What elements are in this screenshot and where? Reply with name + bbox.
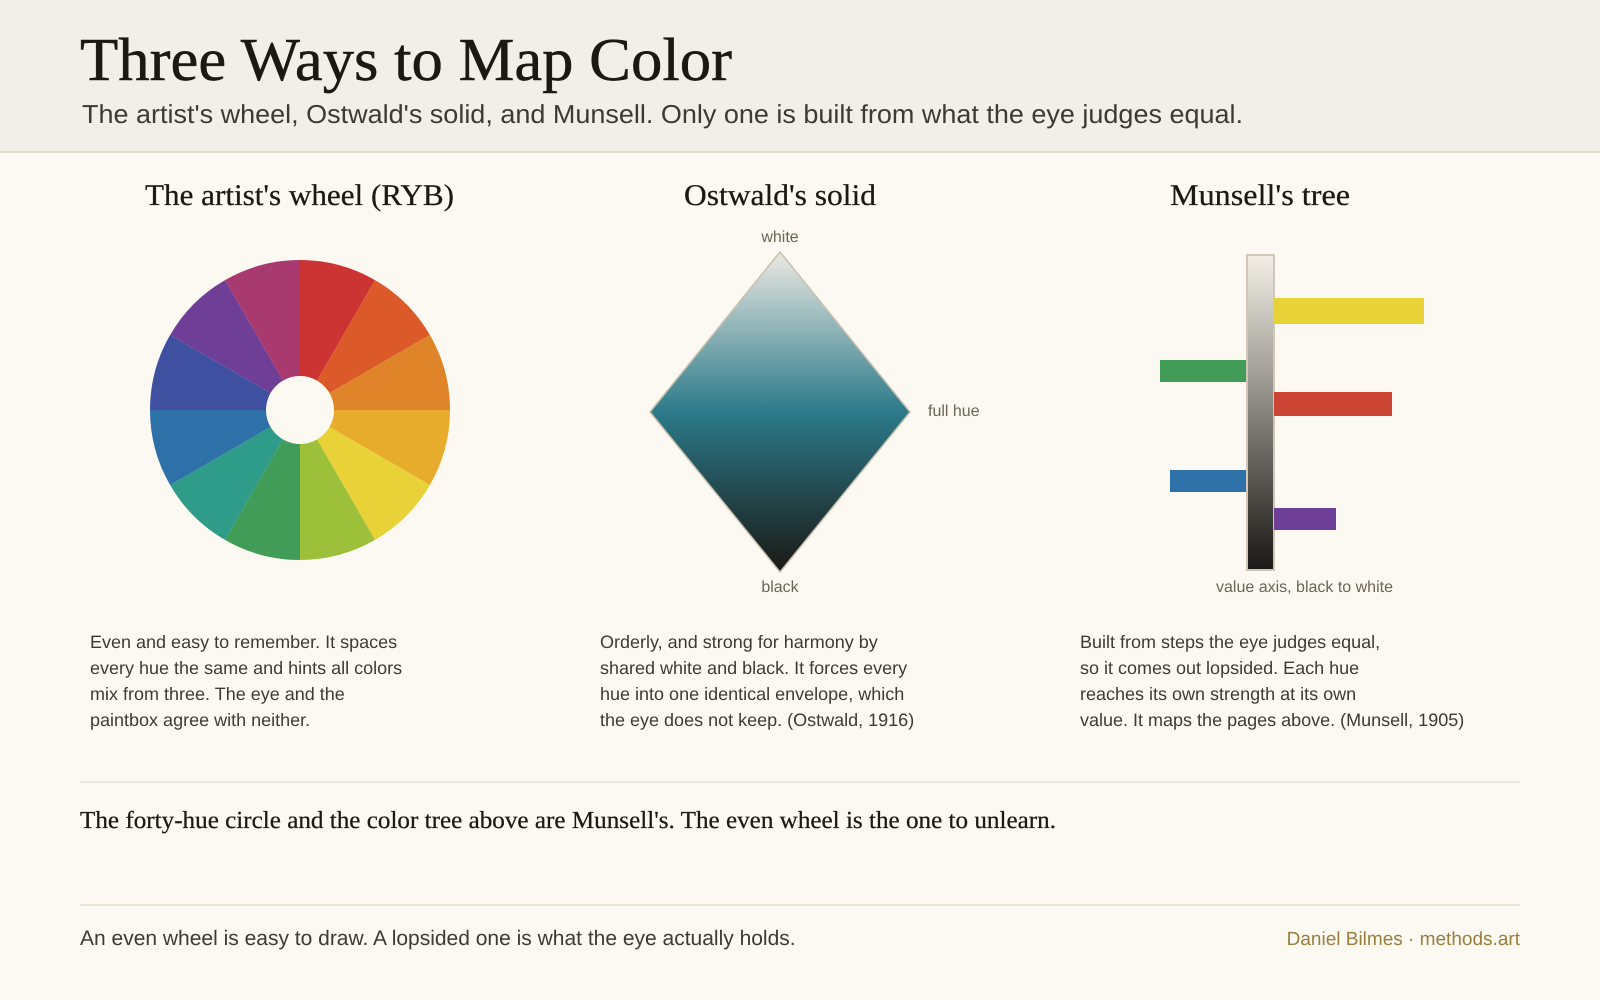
- chart: Ostwald diamond: [650, 252, 910, 572]
- value axis: [1247, 255, 1274, 570]
- text: Ostwald description: hue into one identical envelope, which: [600, 684, 904, 704]
- label: value axis: value axis, black to white: [1216, 579, 1393, 596]
- text: Ostwald description: the eye does not keep. (Ostwald, 1916): [600, 710, 914, 730]
- bar: blue: [1170, 470, 1246, 492]
- bar: green: [1160, 360, 1246, 382]
- header band: [0, 0, 1600, 153]
- subtitle: The artist's wheel, Ostwald's solid, and Munsell. Only one is built from what the eye judges equal.: [82, 99, 1243, 129]
- footer credit: Daniel Bilmes · methods.art: [1287, 929, 1521, 950]
- text: Ostwald description: shared white and black. It forces every: [600, 658, 907, 678]
- text: Munsell description: so it comes out lopsided. Each hue: [1080, 658, 1359, 678]
- heading: Ostwald's solid: Ostwald's solid: [684, 179, 876, 212]
- label: black: black: [761, 579, 800, 596]
- note: The forty-hue circle and the color tree above are Munsell's. The even wheel is the one to unlearn.: [80, 807, 1056, 834]
- heading: Munsell's tree: Munsell's tree: [1170, 179, 1350, 212]
- text: Munsell description: value. It maps the pages above. (Munsell, 1905): [1080, 710, 1464, 730]
- text: Munsell description: Built from steps the eye judges equal,: [1080, 632, 1380, 652]
- text: wheel description: paintbox agree with neither.: [90, 710, 310, 730]
- bar: purple: [1274, 508, 1336, 530]
- chart: Munsell tree: [1160, 255, 1424, 570]
- text: Ostwald description: Orderly, and strong for harmony by: [600, 632, 878, 652]
- label: white: white: [760, 229, 799, 246]
- text: Munsell description: reaches its own strength at its own: [1080, 684, 1356, 704]
- text: wheel description: mix from three. The eye and the: [90, 684, 345, 704]
- text: wheel description: every hue the same and hints all colors: [90, 658, 402, 678]
- bar: red: [1274, 392, 1392, 416]
- footer takeaway: An even wheel is easy to draw. A lopsided one is what the eye actually holds.: [80, 927, 796, 950]
- heading: artist's wheel: The artist's wheel (RYB): [145, 179, 454, 212]
- text: wheel description: Even and easy to remember. It spaces: [90, 632, 397, 652]
- title: Three Ways to Map Color: [80, 27, 732, 94]
- bar: yellow: [1274, 298, 1424, 324]
- label: full hue: full hue: [928, 403, 980, 420]
- chart: RYB colour wheel: [150, 260, 450, 560]
